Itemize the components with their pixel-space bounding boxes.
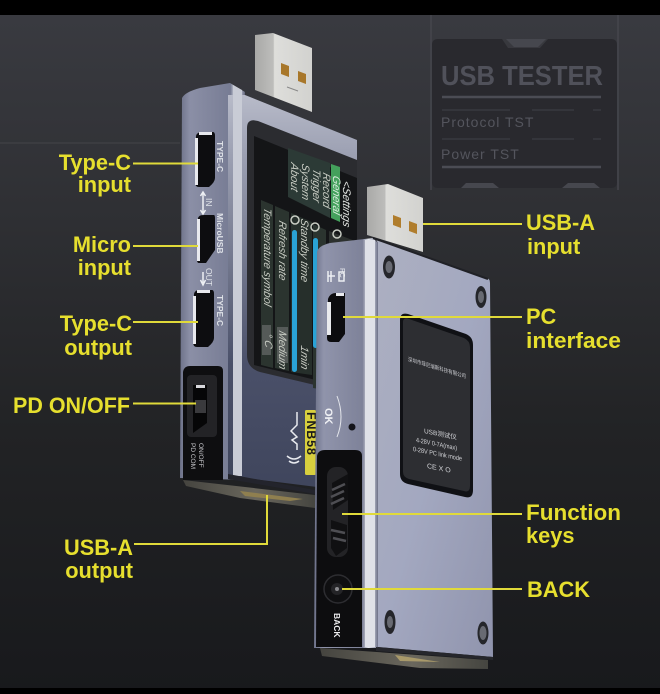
callout: Type-C input: input	[78, 172, 131, 197]
sticker spec text: 0-28V PC link mode	[413, 446, 462, 463]
screen: settings rows: 1min	[298, 344, 310, 371]
port labels: OUT	[204, 268, 214, 286]
bottom plate	[320, 648, 488, 669]
callout: PC interface: interface	[526, 328, 621, 353]
sticker spec text: USB测试仪	[424, 426, 457, 442]
screen: settings rows	[261, 200, 355, 395]
callout: USB-A output	[64, 495, 267, 583]
screen: menu panel: Trigger	[310, 167, 322, 205]
callout: BACK: BACK	[527, 577, 590, 602]
callout: USB-A output: USB-A	[64, 535, 133, 560]
screen: menu panel: About	[288, 160, 300, 194]
front device	[314, 238, 493, 669]
callout: Type-C output	[60, 311, 198, 360]
logo: waveform	[287, 412, 301, 463]
top black band	[0, 0, 660, 15]
callout: Type-C output: Type-C	[60, 311, 132, 336]
port: PC interface	[327, 293, 345, 342]
callout: Type-C input	[59, 150, 198, 197]
screen: settings rows: ° C	[262, 331, 274, 351]
face	[228, 95, 357, 492]
callout: Type-C output: output	[64, 335, 132, 360]
screen: menu panel	[288, 148, 342, 222]
PD switch panel	[183, 366, 223, 480]
screen bezel	[247, 120, 357, 395]
wheel	[331, 474, 348, 556]
screen: settings rows: Temperature symbol	[261, 206, 273, 308]
callout: USB-A output: output	[65, 558, 133, 583]
sticker spec text: 4-28V 0-7A(max)	[416, 437, 457, 452]
screen: settings rows: Standby time	[298, 217, 310, 284]
callout: PC interface	[343, 304, 621, 353]
callout: Function keys: keys	[526, 523, 574, 548]
spine	[180, 83, 245, 480]
text: PC: PC	[338, 268, 345, 278]
callout: Function keys	[342, 500, 621, 548]
port labels: TYPE-C	[215, 295, 225, 326]
screen: menu panel: General	[330, 174, 342, 217]
callout: Function keys: Function	[526, 500, 621, 525]
function keys panel	[316, 450, 362, 647]
PD switch panel: PD COM	[189, 443, 196, 469]
title: Settings: <Settings	[340, 179, 352, 229]
callout: USB-A input: input	[527, 234, 580, 259]
heading: USB TESTER: USB TESTER	[441, 60, 603, 91]
PC icon	[328, 271, 344, 282]
rear USB-A plug	[255, 33, 312, 112]
port: Type-C output	[193, 290, 214, 347]
callout: PD ON/OFF: PD ON/OFF	[13, 393, 130, 418]
port labels: MicroUSB	[215, 213, 225, 254]
callout: USB-A input	[423, 210, 595, 259]
port: Type-C input	[195, 132, 215, 187]
screen: menu panel: System	[299, 162, 311, 202]
OK mark: OK	[322, 408, 334, 425]
screen: settings rows: Refresh rate	[276, 219, 288, 282]
face	[375, 238, 493, 657]
badge: FNB58: FNB58	[304, 412, 318, 456]
callout: Micro input: input	[78, 255, 131, 280]
text: Protocol TST: Protocol TST	[441, 114, 534, 130]
sticker	[400, 314, 473, 497]
callout: Micro input: Micro	[73, 232, 131, 257]
function keys panel: BACK	[332, 613, 342, 638]
callout: Micro input	[73, 232, 198, 280]
port: Micro USB input	[197, 215, 215, 263]
port labels: TYPE-C	[215, 141, 225, 172]
PD switch panel: ON/OFF	[197, 443, 204, 468]
sticker spec text	[413, 426, 462, 475]
background panel: USB tester	[431, 15, 618, 190]
port labels	[200, 141, 225, 326]
screen: settings rows: Medium	[276, 329, 288, 371]
screws	[383, 256, 488, 644]
port labels: IN	[204, 198, 214, 206]
text: Power TST: Power TST	[441, 146, 520, 162]
callout: USB-A input: USB-A	[526, 210, 595, 235]
badge: FNB58	[304, 410, 318, 475]
front USB-A plug	[367, 184, 423, 252]
menu highlight: General	[331, 164, 340, 222]
BACK knob	[324, 575, 352, 603]
bottom black band	[0, 688, 660, 694]
OK mark	[322, 396, 356, 437]
screen: menu panel: Record	[320, 171, 332, 210]
bottom plate	[183, 480, 315, 508]
sticker company text: 深圳市菲尼瑞斯科技有限公司	[408, 355, 466, 380]
sticker spec text: CE X O	[427, 463, 451, 475]
callout: PC interface: PC	[526, 304, 557, 329]
spine	[314, 238, 378, 648]
callout: Type-C input: Type-C	[59, 150, 131, 175]
rear device	[180, 83, 357, 508]
